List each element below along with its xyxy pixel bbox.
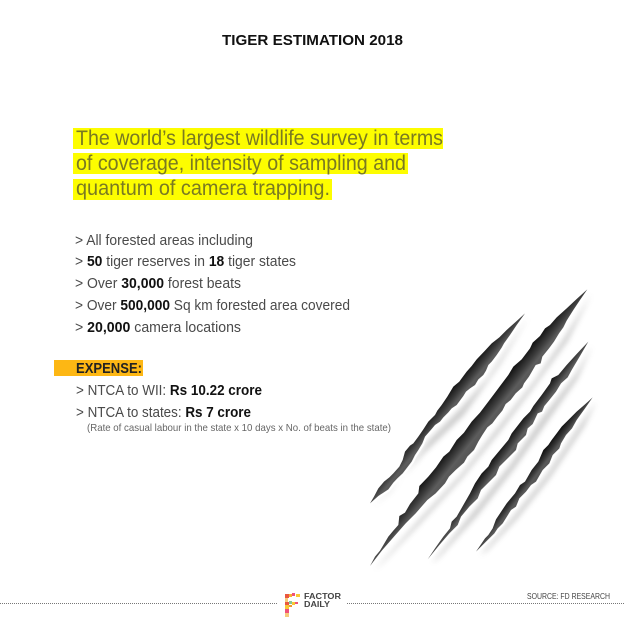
footer dotted line right	[347, 602, 625, 604]
claw scratch marks	[370, 289, 597, 570]
logo wordmark	[304, 592, 341, 609]
icon: Factor Daily logo mark	[285, 593, 300, 617]
expense heading: EXPENSE:	[76, 361, 142, 377]
scratch 4	[476, 397, 597, 555]
expense details: > NTCA to states: Rs 7 crore	[76, 405, 251, 421]
scratch 2	[370, 289, 592, 570]
expense details: > NTCA to WII: Rs 10.22 crore	[76, 383, 262, 399]
headline highlighted statement: quantum of camera trapping.	[76, 177, 330, 200]
survey facts list: > Over 30,000 forest beats	[75, 276, 241, 292]
survey facts list: > 50 tiger reserves in 18 tiger states	[75, 254, 296, 270]
scratch 3	[428, 342, 592, 563]
expense details: (Rate of casual labour in the state x 10 days x No. of beats in the state)	[87, 422, 391, 434]
headline highlighted statement	[73, 127, 443, 200]
expense heading	[54, 360, 143, 377]
expense details	[76, 383, 391, 434]
headline highlighted statement: of coverage, intensity of sampling and	[76, 152, 406, 175]
survey facts list	[75, 233, 350, 336]
headline highlighted statement: The world’s largest wildlife survey in terms	[76, 127, 443, 150]
survey facts list: > All forested areas including	[75, 233, 253, 249]
survey facts list: > Over 500,000 Sq km forested area covered	[75, 298, 350, 314]
footer dotted line left	[0, 602, 278, 604]
logo wordmark: DAILY	[304, 600, 331, 609]
scratch 1	[370, 313, 529, 507]
logo wordmark: FACTOR	[304, 592, 341, 601]
survey facts list: > 20,000 camera locations	[75, 320, 241, 336]
title: TIGER ESTIMATION 2018	[222, 32, 403, 49]
